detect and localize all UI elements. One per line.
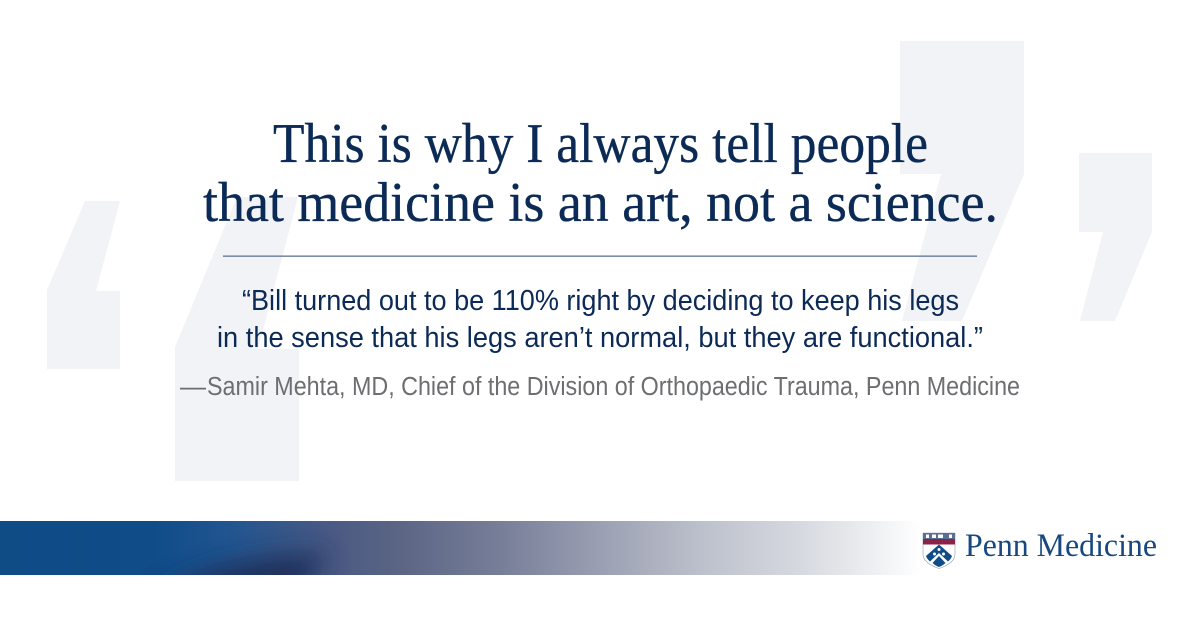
headline: that medicine is an art, not a science. [203, 172, 998, 234]
headline [203, 113, 998, 234]
headline: This is why I always tell people [273, 113, 928, 175]
icon: Penn shield [923, 533, 955, 568]
quote text: “Bill turned out to be 110% right by deciding to keep his legs [242, 285, 959, 317]
quote text [217, 285, 983, 354]
decorative opening quotation mark [47, 197, 299, 481]
decorative closing quotation mark [900, 41, 1152, 321]
divider rule [223, 256, 977, 257]
Penn Medicine logo [923, 528, 1157, 568]
logo wordmark: Penn Medicine [965, 528, 1157, 564]
quote text: in the sense that his legs aren’t normal, but they are functional.” [217, 322, 983, 354]
gradient footer bar [0, 521, 898, 575]
attribution: — [180, 373, 207, 401]
attribution: Samir Mehta, MD, Chief of the Division of Orthopaedic Trauma, Penn Medicine [207, 373, 1020, 401]
